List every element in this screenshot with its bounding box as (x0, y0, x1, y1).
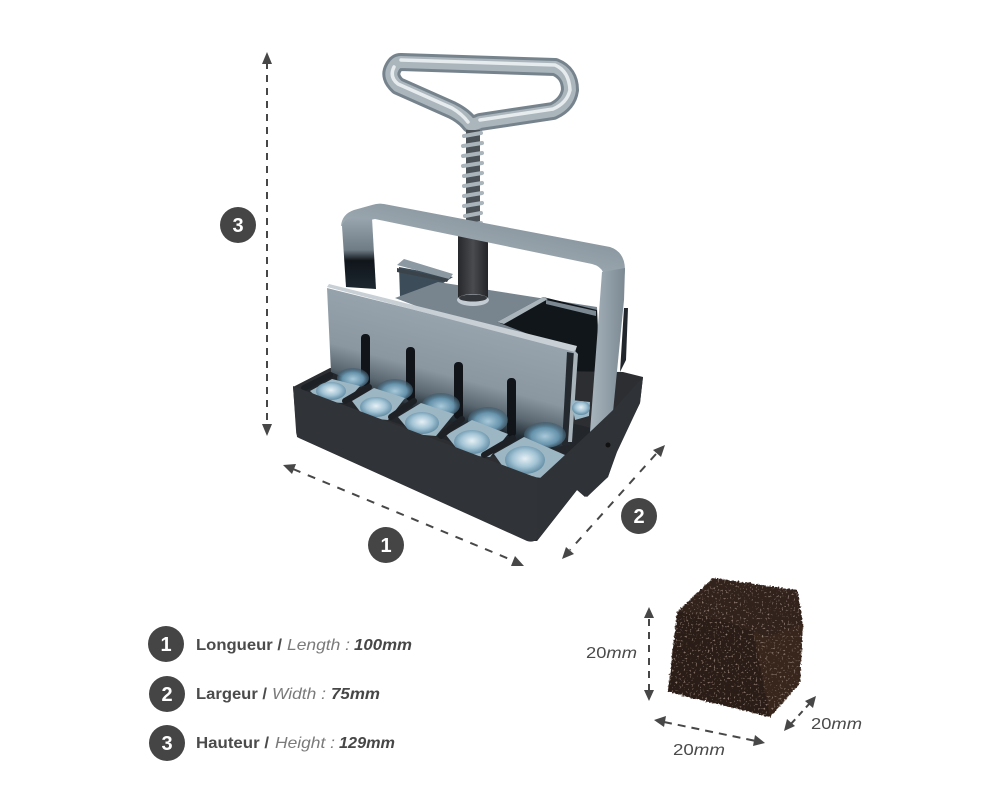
legend row 3: Hauteur / (196, 735, 270, 752)
legend row 3: 129mm (339, 735, 395, 752)
legend (148, 626, 412, 761)
legend row 3 (149, 725, 395, 761)
cube height label: 20mm (586, 645, 637, 662)
back right edge (620, 308, 628, 372)
soil cube (668, 578, 803, 717)
legend row 2: Largeur / (196, 686, 268, 703)
bracket top band and left leg (341, 204, 625, 300)
legend row 3: 3 (161, 733, 173, 755)
base right face (537, 377, 643, 541)
legend row 1 (148, 626, 412, 662)
length dimension arrow (283, 464, 524, 566)
badge 1 (368, 527, 404, 563)
legend row 2: 2 (161, 684, 173, 706)
badge 2 (621, 498, 657, 534)
legend row 1: Longueur / (196, 637, 283, 654)
badge 3: 3 (232, 215, 244, 237)
badge 1: 1 (380, 535, 392, 557)
badge 2: 2 (633, 506, 645, 528)
cavity floor (300, 368, 600, 474)
right cup (571, 400, 590, 420)
legend row 1: 1 (160, 634, 172, 656)
width dimension arrow (562, 445, 665, 559)
rear cups (337, 368, 566, 448)
front cups (316, 382, 545, 474)
height dimension arrow (262, 52, 272, 436)
legend row 3: Height : (275, 735, 335, 752)
top plate (395, 236, 600, 400)
cup floor plates (310, 379, 565, 478)
badge 3 (220, 207, 256, 243)
base rim (293, 368, 643, 541)
cube length label: 20mm (673, 742, 725, 759)
dividers (304, 375, 513, 455)
back guide rail (397, 259, 453, 297)
plate slots (361, 334, 516, 437)
legend row 2: Width : (272, 686, 326, 703)
base front face (293, 386, 540, 542)
handle (391, 60, 570, 124)
legend row 2 (149, 676, 380, 712)
spring (462, 130, 484, 234)
product: seed block maker (293, 60, 643, 542)
cube width label: 20mm (811, 716, 862, 733)
cube length arrow (654, 716, 765, 746)
cube height arrow (644, 607, 654, 701)
legend row 1: Length : (287, 637, 350, 654)
legend row 1: 100mm (354, 637, 412, 654)
bracket right leg (590, 268, 625, 432)
cube width arrow (784, 696, 816, 731)
front plate (327, 284, 578, 458)
legend row 2: 75mm (331, 686, 380, 703)
